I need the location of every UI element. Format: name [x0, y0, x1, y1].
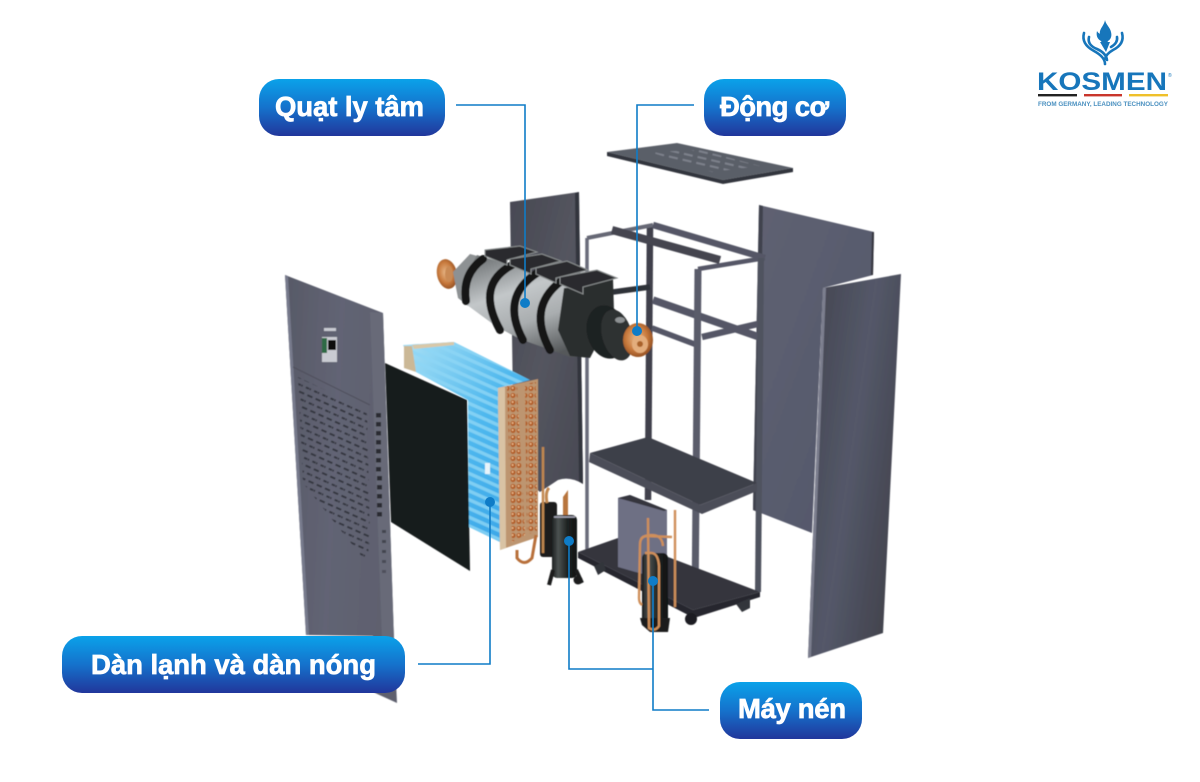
outlets [485, 246, 617, 294]
right panel, front [808, 274, 901, 658]
compressor, rear [540, 447, 557, 557]
perforated grille [298, 377, 370, 563]
rear posts [587, 226, 650, 555]
label: Máy nén [720, 682, 862, 739]
compressor, right [639, 510, 675, 632]
drum [463, 255, 583, 357]
registered mark: ® [1168, 72, 1172, 79]
top ring [587, 225, 765, 269]
coil, copper end plate [498, 379, 538, 562]
color bars [1038, 94, 1168, 96]
coupling [581, 301, 638, 364]
label: Quạt ly tâm: Quạt ly tâm [275, 91, 424, 122]
front panel [285, 275, 397, 703]
side vents [376, 413, 386, 573]
left motor [434, 257, 460, 291]
logo: Kosmen [1037, 20, 1172, 108]
callout line: compressors [565, 537, 709, 710]
compressor, left [549, 490, 582, 585]
exploded product illustration [285, 143, 901, 703]
front posts [695, 258, 761, 608]
label: Dàn lạnh và dàn nóng [62, 636, 405, 693]
wordmark: KOSMEN [1037, 68, 1167, 96]
left cone [453, 254, 485, 306]
label: Động cơ: Động cơ [720, 91, 829, 122]
frame [587, 225, 765, 608]
callout line: coils [418, 498, 494, 664]
coil, blue fins [403, 342, 530, 542]
callout line: motor [633, 105, 694, 335]
filter sheet [385, 363, 470, 571]
right panel, rear [753, 205, 874, 533]
label: Máy nén: Máy nén [738, 693, 846, 724]
back panel [510, 192, 583, 492]
icon: flame and wings [1083, 20, 1123, 64]
cross bars [613, 287, 762, 345]
top cover plate [607, 143, 793, 184]
right motor [623, 323, 653, 357]
label: Động cơ [704, 79, 846, 136]
callout line: fan [456, 105, 529, 307]
tagline: FROM GERMANY, LEADING TECHNOLOGY [1038, 101, 1169, 108]
centrifugal fan [434, 246, 653, 364]
display [322, 337, 337, 362]
label: Dàn lạnh và dàn nóng: Dàn lạnh và dàn nóng [91, 649, 376, 680]
label: Quạt ly tâm [259, 79, 445, 136]
panel badge [324, 328, 336, 331]
middle shelf [589, 437, 757, 514]
bottom shelf and castors [578, 538, 760, 625]
drum bands [465, 259, 560, 350]
control box [618, 495, 667, 577]
housing [558, 278, 614, 358]
